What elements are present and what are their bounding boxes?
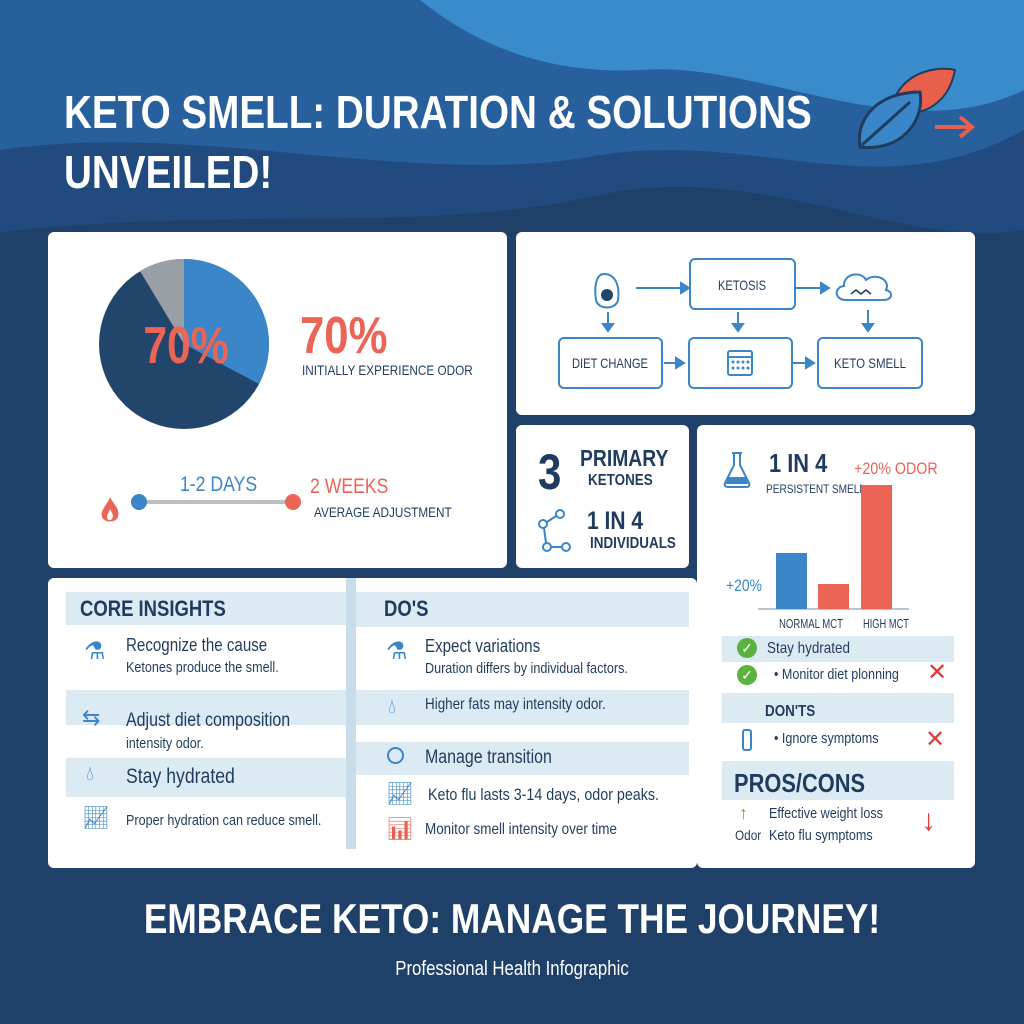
icon: avocado [595, 274, 618, 308]
do's list [386, 636, 659, 841]
pros cons items [735, 803, 936, 844]
panel: bar chart & lists [697, 425, 975, 868]
check items [737, 638, 947, 686]
footer subtitle: Professional Health Infographic [395, 958, 629, 980]
panel: bar chart & lists: +20% ODOR [854, 459, 938, 478]
core insights list [82, 635, 321, 830]
don't item: ✕ [925, 726, 945, 753]
panel: ketones stats [516, 425, 689, 568]
pie chart [99, 259, 269, 429]
panel: ketones stats: INDIVIDUALS [590, 535, 676, 552]
panel: ketones stats: 1 IN 4 [587, 507, 643, 535]
panel: ketones stats: PRIMARY [580, 445, 668, 471]
icon: flask [724, 452, 750, 488]
panel: bar chart & lists: 1 IN 4 [769, 448, 827, 478]
core insights list: Adjust diet composition [126, 710, 290, 731]
box: calendar [689, 338, 792, 388]
timeline: AVERAGE ADJUSTMENT [314, 504, 452, 520]
heading: don'ts: DON'TS [765, 703, 815, 720]
check items: • Monitor diet plonning [774, 666, 899, 683]
icon: leaf with arrow [858, 68, 975, 149]
core insights list: ⇆ [82, 705, 100, 730]
bar chart: NORMAL MCT [779, 616, 843, 631]
box: ketosis: KETOSIS [718, 277, 766, 293]
box: diet change: DIET CHANGE [572, 355, 648, 371]
don't item: • Ignore symptoms [774, 730, 879, 747]
bar chart [726, 485, 909, 631]
check items: ✓ [741, 640, 753, 656]
do's list: Monitor smell intensity over time [425, 821, 617, 838]
heading: core insights: CORE INSIGHTS [80, 596, 226, 621]
core insights list: Ketones produce the smell. [126, 659, 279, 676]
core insights list: intensity odor. [126, 735, 204, 752]
do's list: Keto flu lasts 3-14 days, odor peaks. [428, 785, 659, 804]
box: ketosis [690, 259, 795, 309]
timeline: 1-2 DAYS [180, 473, 257, 496]
don't item [742, 726, 945, 753]
core insights list: Recognize the cause [126, 635, 267, 655]
check items: ✓ [741, 667, 753, 683]
title: UNVEILED! [64, 146, 272, 198]
core insights list: Stay hydrated [126, 765, 235, 788]
do's list: ⚗ [386, 638, 408, 665]
do's list: 📊︎ [386, 816, 414, 841]
panel: ketones stats: KETONES [588, 472, 653, 489]
core insights list: Proper hydration can reduce smell. [126, 812, 321, 829]
heading: do's: DO'S [384, 596, 428, 621]
do's list: Manage transition [425, 747, 552, 768]
do's list: Duration differs by individual factors. [425, 660, 628, 677]
core insights list: ⚗ [84, 638, 106, 665]
panel: insights and do's [48, 578, 697, 868]
bar chart: HIGH MCT [863, 616, 909, 631]
panel: pie stats [48, 232, 507, 568]
do's list: Expect variations [425, 636, 540, 656]
heading: pros/cons: PROS/CONS [734, 768, 865, 798]
do's list: 💧︎ [388, 696, 396, 718]
bar chart: +20% [726, 576, 762, 595]
timeline: 2 WEEKS [310, 475, 388, 498]
check items: ✕ [927, 659, 947, 686]
box: keto smell: KETO SMELL [834, 355, 906, 371]
timeline [102, 473, 452, 522]
footer title: EMBRACE KETO: MANAGE THE JOURNEY! [144, 895, 880, 942]
pros cons items: ↑ [739, 803, 748, 823]
icon: fire [102, 497, 118, 522]
panel: ketones stats: 3 [538, 444, 561, 500]
icon: molecule [538, 509, 571, 552]
pros cons items: Odor [735, 827, 761, 843]
core insights list: 📈︎ [82, 805, 110, 830]
core insights list: 💧︎ [86, 763, 94, 785]
icon: cloud [837, 274, 891, 300]
pros cons items: Keto flu symptoms [769, 827, 873, 844]
pros cons items: ↓ [921, 804, 936, 837]
pie chart: 70% [143, 317, 229, 375]
do's list: 📈︎ [386, 781, 414, 806]
box: diet change [559, 338, 662, 388]
box: keto smell [818, 338, 922, 388]
panel: flowchart [516, 232, 975, 415]
label: initially experience odor: INITIALLY EXPERIENCE ODOR [302, 362, 473, 378]
stat 70%: 70% [300, 307, 387, 365]
pros cons items: Effective weight loss [769, 805, 883, 822]
title: KETO SMELL: DURATION & SOLUTIONS [64, 86, 812, 138]
do's list: Higher fats may intensity odor. [425, 696, 606, 713]
panel: bar chart & lists: PERSISTENT SMELL [766, 482, 865, 496]
check items: Stay hydrated [767, 640, 850, 657]
title [64, 86, 812, 198]
